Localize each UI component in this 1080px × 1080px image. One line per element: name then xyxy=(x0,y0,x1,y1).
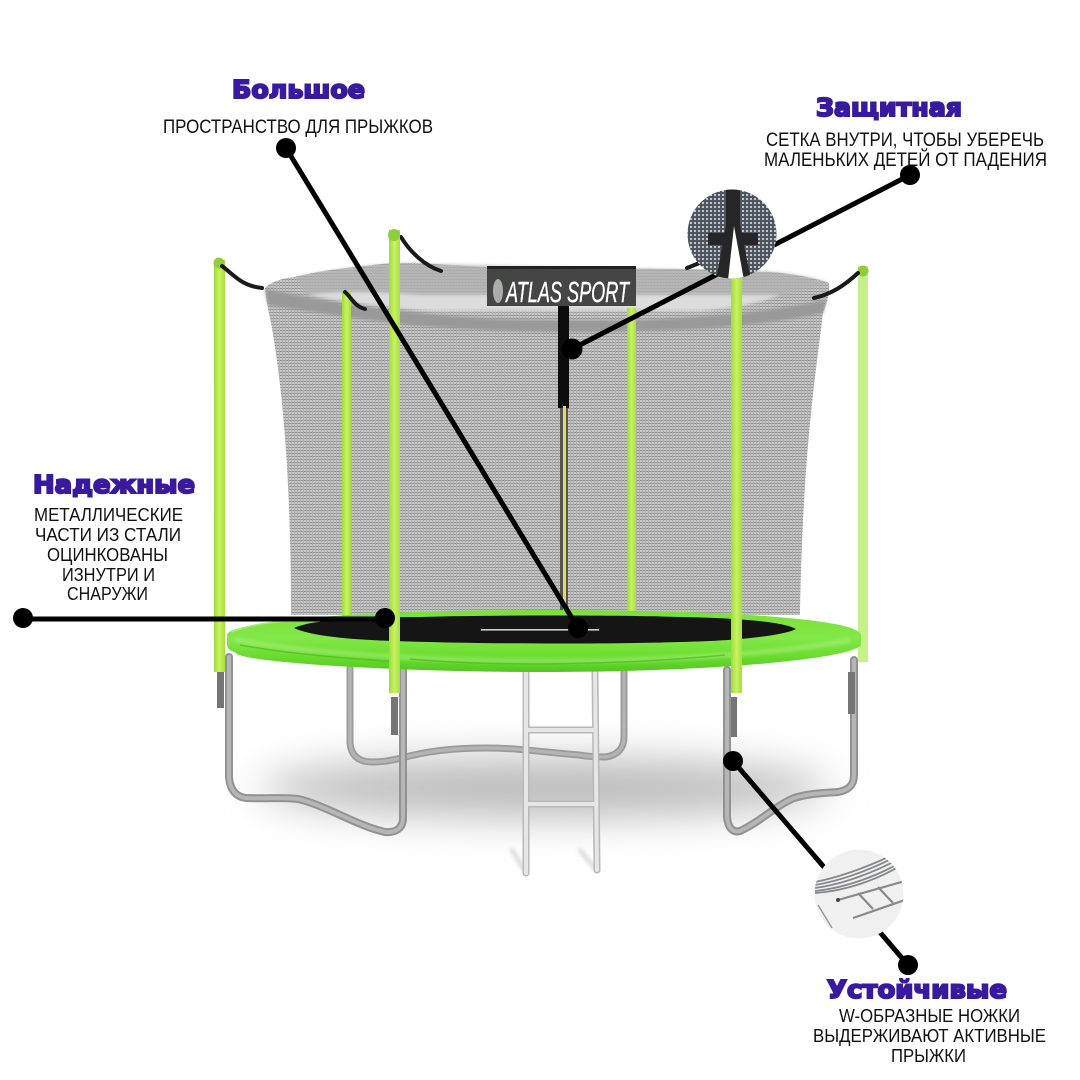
jumping mat xyxy=(294,616,796,644)
description: МЕТАЛЛИЧЕСКИЕ xyxy=(34,504,183,525)
black net straps xyxy=(222,237,858,309)
pointer line xyxy=(13,608,395,628)
description: ИЗНУТРИ И xyxy=(62,564,155,585)
pointer line xyxy=(276,138,588,638)
brand name: ATLAS SPORT xyxy=(505,277,630,309)
description: ЧАСТИ ИЗ СТАЛИ xyxy=(35,524,181,545)
description: ПРЫЖКИ xyxy=(891,1045,966,1066)
logo emblem xyxy=(493,279,503,303)
front legs xyxy=(229,657,854,832)
callout: Надежные xyxy=(13,470,395,628)
ladder xyxy=(512,672,597,873)
description: МАЛЕНЬКИХ ДЕТЕЙ ОТ ПАДЕНИЯ xyxy=(764,147,1047,171)
ground shadow xyxy=(260,758,830,818)
description: ОЦИНКОВАНЫ xyxy=(47,544,168,565)
zipper strap xyxy=(558,306,569,640)
heading: Надежные xyxy=(33,470,195,499)
heading: Большое xyxy=(232,75,365,104)
back poles xyxy=(342,292,636,617)
description: СНАРУЖИ xyxy=(67,583,148,604)
description xyxy=(813,1005,1046,1066)
heading: Защитная xyxy=(816,93,962,122)
description: ПРОСТРАНСТВО ДЛЯ ПРЫЖКОВ xyxy=(163,116,433,138)
detail inset: W-shaped legs xyxy=(814,849,905,939)
description: СЕТКА ВНУТРИ, ЧТОБЫ УБЕРЕЧЬ xyxy=(766,129,1044,151)
pointer line xyxy=(723,751,918,975)
pointer line xyxy=(562,165,920,360)
green frame pad xyxy=(227,610,861,672)
callout: Устойчивые xyxy=(723,751,1046,1066)
safety net xyxy=(265,263,829,615)
trampoline illustration xyxy=(214,229,868,873)
description: ВЫДЕРЖИВАЮТ АКТИВНЫЕ xyxy=(813,1025,1046,1046)
callout: Защитная xyxy=(562,93,1047,360)
description: W-ОБРАЗНЫЕ НОЖКИ xyxy=(839,1005,1020,1026)
leg brackets xyxy=(217,672,855,737)
outer poles xyxy=(214,258,868,672)
sign: Atlas Sport xyxy=(487,266,636,309)
callout: Большое xyxy=(163,75,588,638)
back legs xyxy=(350,668,624,762)
detail inset: net zipper xyxy=(686,188,778,280)
description xyxy=(764,129,1047,171)
heading: Устойчивые xyxy=(827,975,1007,1004)
description xyxy=(34,504,183,604)
front poles xyxy=(388,229,742,693)
